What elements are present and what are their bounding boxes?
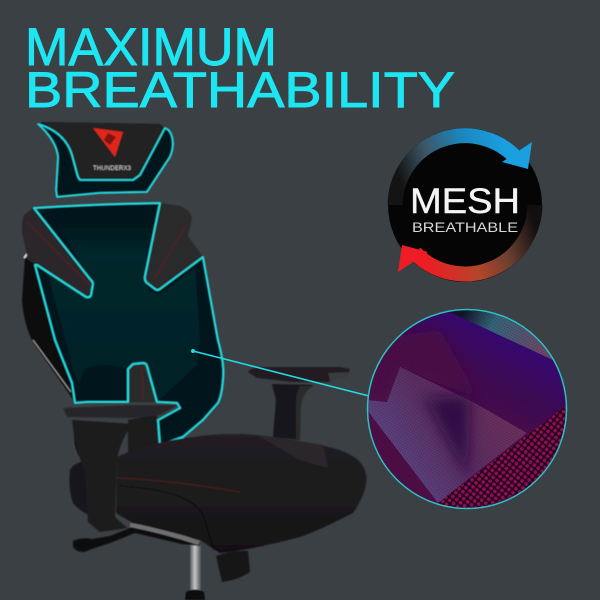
title: MAXIMUM: [25, 18, 277, 77]
lower post behind mesh: [128, 414, 158, 455]
fine mesh texture: [367, 309, 567, 509]
dark magenta left tint: [388, 328, 463, 384]
red arrow: [398, 205, 535, 274]
badge text: MESH: [410, 182, 520, 221]
panel shadow fold: [425, 395, 470, 478]
lighter mesh tint: [47, 220, 200, 402]
right arm mount: [257, 435, 328, 468]
left armrest: [63, 405, 178, 532]
tilt lever and mechanism: [73, 523, 200, 552]
title: BREATHABILITY: [25, 62, 455, 118]
lit mesh panel: [367, 367, 527, 503]
right armrest: [248, 367, 350, 440]
back side panels: [22, 203, 203, 297]
headrest: [38, 122, 173, 197]
blue arrow: [395, 136, 532, 205]
top background strip: [449, 310, 552, 360]
mesh back with cyan outline: [34, 203, 223, 455]
dotted edge fabric: [438, 406, 566, 508]
mesh outline: [34, 203, 223, 445]
lumbar support: [128, 364, 157, 402]
mesh inner shadow: [78, 365, 128, 402]
left rear seat back edge: [69, 460, 96, 518]
chair illustration: [22, 122, 366, 600]
mesh zoom circle: [367, 309, 575, 515]
seat height knob: [216, 551, 250, 582]
frame left side: [22, 254, 76, 404]
leader line: [191, 349, 369, 396]
seat cushion: [116, 434, 366, 553]
mesh breathable badge: BREATHABLE: [412, 219, 518, 235]
mesh breathable badge: [388, 128, 542, 282]
logo: THUNDERX3: [93, 165, 131, 172]
title: [25, 18, 455, 118]
frame ring behind armrest: [73, 422, 90, 468]
chair pole and base: [185, 545, 205, 600]
